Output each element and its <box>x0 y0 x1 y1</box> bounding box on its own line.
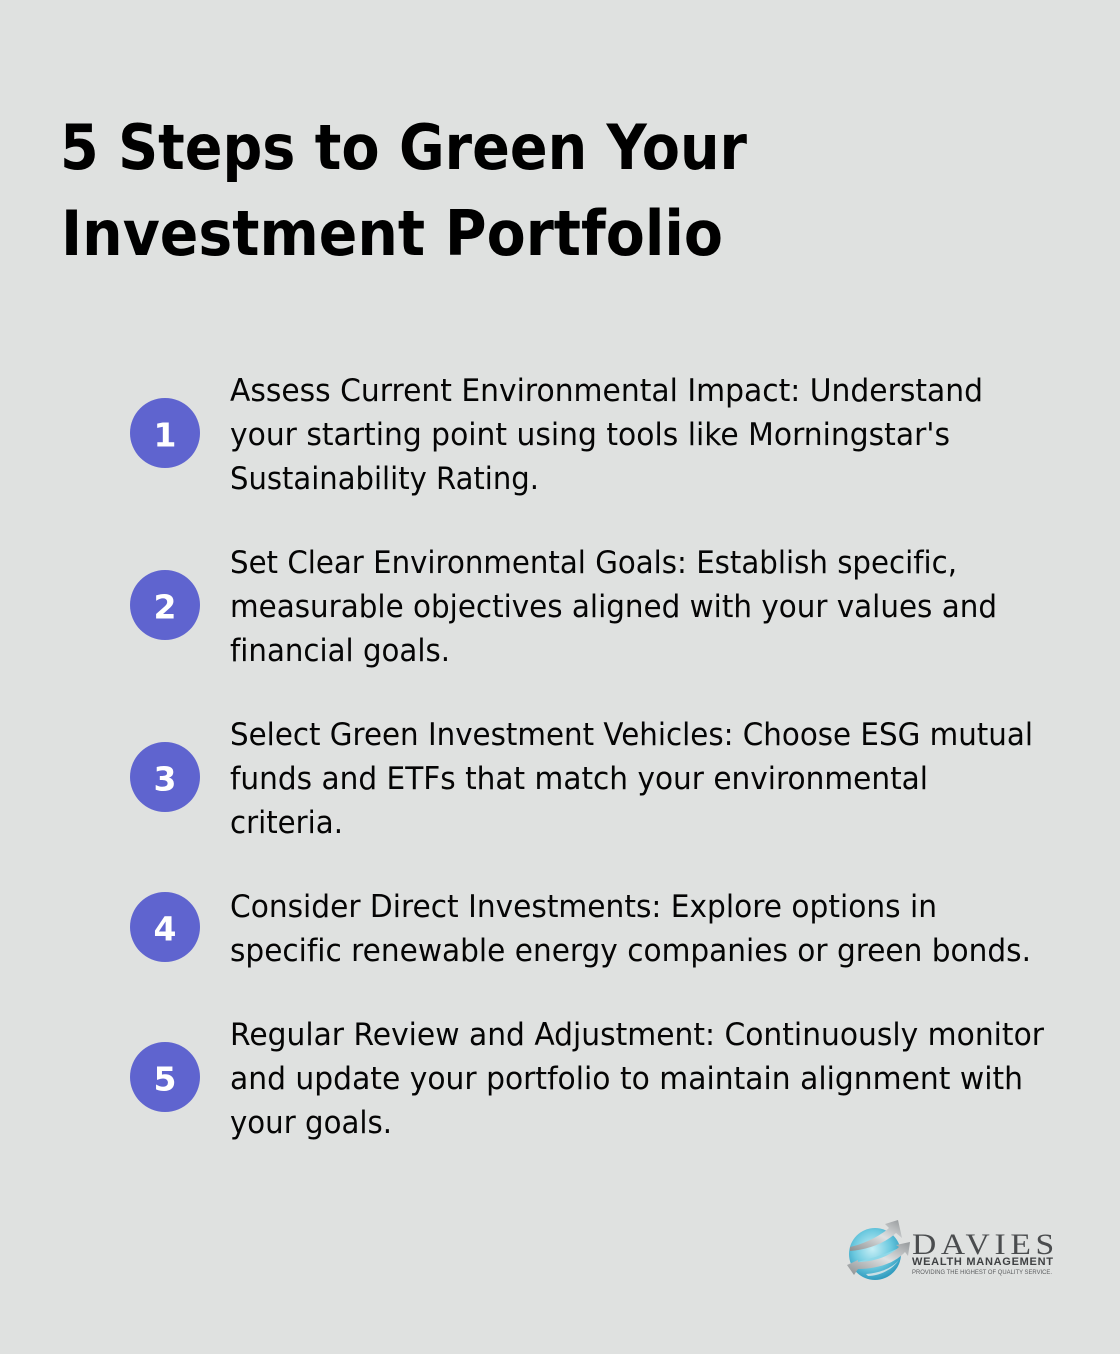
logo: Davies Wealth Management <box>847 1220 1054 1280</box>
text: step 1: your starting point using tools like Morningstar's <box>230 417 950 453</box>
wordmark: WEALTH MANAGEMENT <box>912 1256 1053 1268</box>
icon: globe with arrows <box>847 1220 910 1280</box>
wordmark: PROVIDING THE HIGHEST OF QUALITY SERVICE. <box>912 1269 1052 1276</box>
text: step 2 <box>230 545 997 669</box>
text: step 1 <box>230 373 983 497</box>
text: step 2: Set Clear Environmental Goals: Establish specific, <box>230 545 957 581</box>
badge: 4 <box>130 892 200 962</box>
badge: 3: 3 <box>154 760 176 798</box>
step 4 <box>130 889 1031 969</box>
step 3 <box>130 717 1033 841</box>
step 2 <box>130 545 997 669</box>
text: step 4 <box>230 889 1031 969</box>
badge: 2 <box>130 570 200 640</box>
wordmark <box>912 1228 1054 1276</box>
step 1 <box>130 373 983 497</box>
badge: 1: 1 <box>154 416 176 454</box>
text: step 2: financial goals. <box>230 633 450 669</box>
badge: 5: 5 <box>154 1060 176 1098</box>
text: step 3: criteria. <box>230 805 343 841</box>
badge: 3 <box>130 742 200 812</box>
text: step 2: measurable objectives aligned with your values and <box>230 589 997 625</box>
badge: 2: 2 <box>154 588 176 626</box>
text: step 3: Select Green Investment Vehicles: Choose ESG mutual <box>230 717 1033 753</box>
text: step 1: Assess Current Environmental Impact: Understand <box>230 373 983 409</box>
badge: 4: 4 <box>154 910 176 948</box>
title: 5 Steps to Green Your <box>60 111 747 184</box>
title: Investment Portfolio <box>61 197 723 270</box>
text: step 1: Sustainability Rating. <box>230 461 539 497</box>
step 5 <box>130 1017 1044 1141</box>
text: step 4: specific renewable energy companies or green bonds. <box>230 933 1031 969</box>
text: step 5 <box>230 1017 1044 1141</box>
text: step 5: Regular Review and Adjustment: Continuously monitor <box>230 1017 1044 1053</box>
badge: 1 <box>130 398 200 468</box>
wordmark: DAVIES <box>912 1228 1054 1261</box>
badge: 5 <box>130 1042 200 1112</box>
title <box>60 111 747 270</box>
text: step 5: your goals. <box>230 1105 392 1141</box>
text: step 5: and update your portfolio to maintain alignment with <box>230 1061 1023 1097</box>
text: step 3: funds and ETFs that match your environmental <box>230 761 928 797</box>
text: step 3 <box>230 717 1033 841</box>
text: step 4: Consider Direct Investments: Explore options in <box>230 889 937 925</box>
